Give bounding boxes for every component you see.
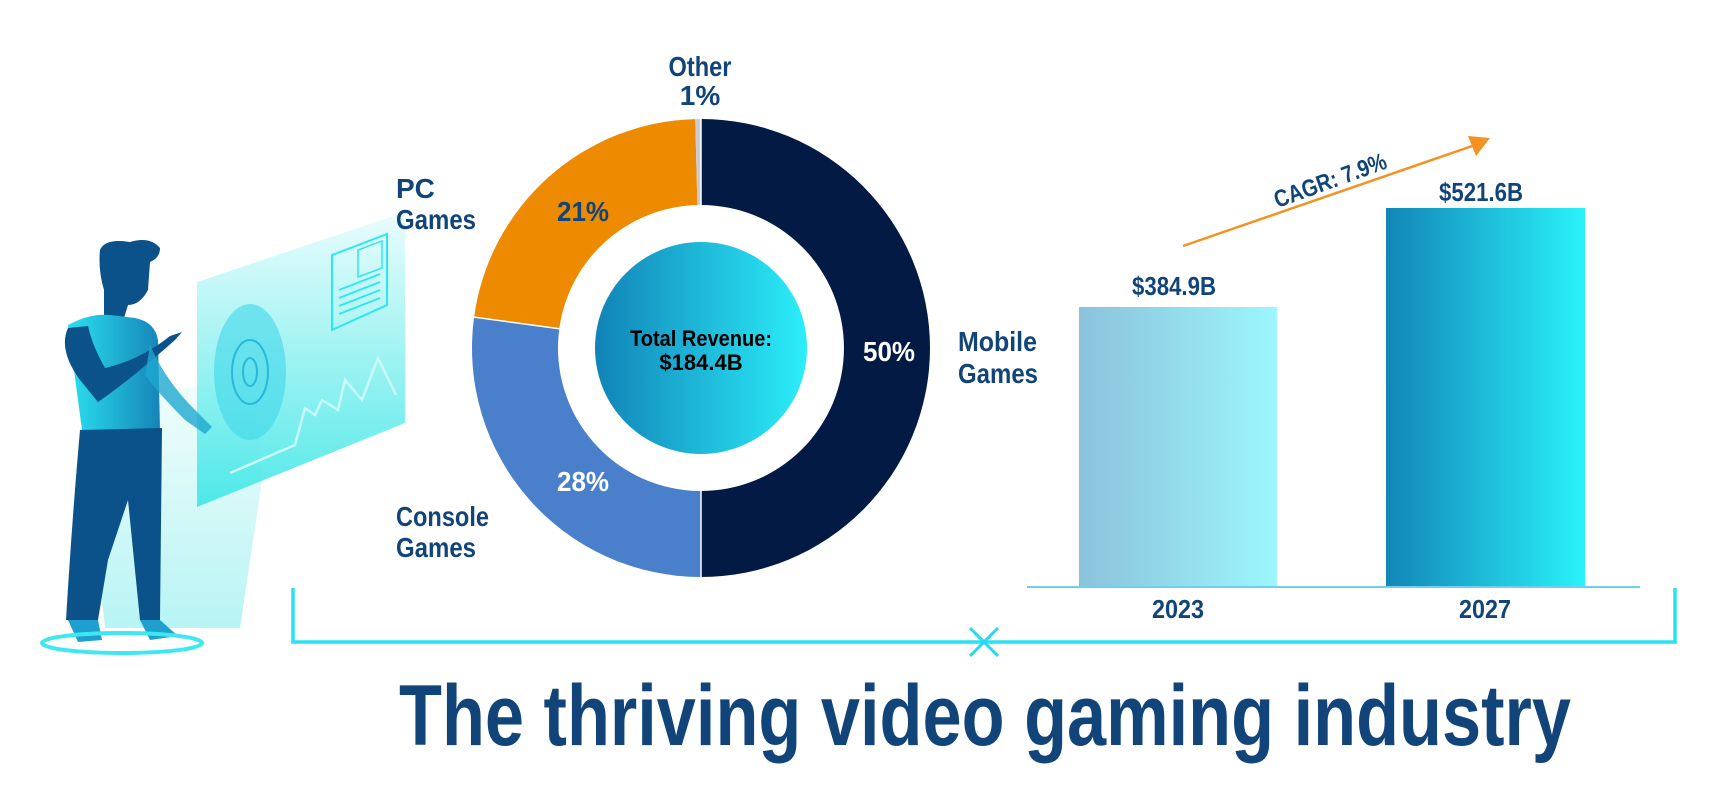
label: Mobile Games — [958, 326, 1038, 389]
bracket frame with X marker — [293, 588, 1675, 656]
segment: Console 28% — [472, 317, 701, 577]
center circle: total revenue: $184.4B — [659, 350, 743, 375]
person — [65, 240, 212, 642]
label: Console Games: Games — [396, 532, 476, 563]
holographic panel — [197, 212, 405, 507]
bar chart: market size 2023 vs 2027: 2027 — [1459, 594, 1511, 624]
bar chart: market size 2023 vs 2027: $521.6B — [1439, 177, 1523, 207]
icon: X marker — [970, 628, 998, 656]
year labels: 2023 — [1152, 594, 1204, 624]
percent labels: 21% — [557, 196, 609, 227]
label: Mobile Games: Mobile — [958, 326, 1037, 357]
label: PC Games: Games — [396, 204, 476, 235]
donut chart: revenue share: 50% — [863, 336, 915, 367]
bar 2023 — [1079, 307, 1277, 586]
bar 2027 — [1386, 208, 1585, 586]
value labels: $384.9B — [1132, 271, 1216, 301]
label: Other 1%: 1% — [680, 80, 720, 111]
donut chart: revenue share — [472, 119, 930, 577]
center circle: total revenue: Total Revenue: — [630, 326, 772, 351]
donut chart: revenue share: 28% — [557, 466, 609, 497]
label: Other 1% — [668, 51, 732, 111]
segment: Mobile 50% — [701, 119, 930, 577]
bar chart: market size 2023 vs 2027 — [1027, 177, 1640, 624]
center circle: total revenue — [595, 242, 807, 454]
arrow: CAGR growth: CAGR: 7.9% — [1270, 148, 1390, 214]
segment: Other 1% — [695, 119, 701, 205]
illustration: person with holographic panel — [42, 212, 405, 653]
label: PC Games — [396, 173, 476, 235]
label: Console Games — [396, 501, 489, 563]
label: Console Games: Console — [396, 501, 489, 532]
segment: PC 21% — [474, 119, 697, 329]
arrow: CAGR growth — [1183, 136, 1490, 246]
label: PC Games: PC — [396, 173, 435, 204]
label: Mobile Games: Games — [958, 358, 1038, 389]
light beam — [80, 380, 262, 628]
floor ring — [42, 633, 202, 653]
label: Other 1%: Other — [668, 51, 732, 82]
